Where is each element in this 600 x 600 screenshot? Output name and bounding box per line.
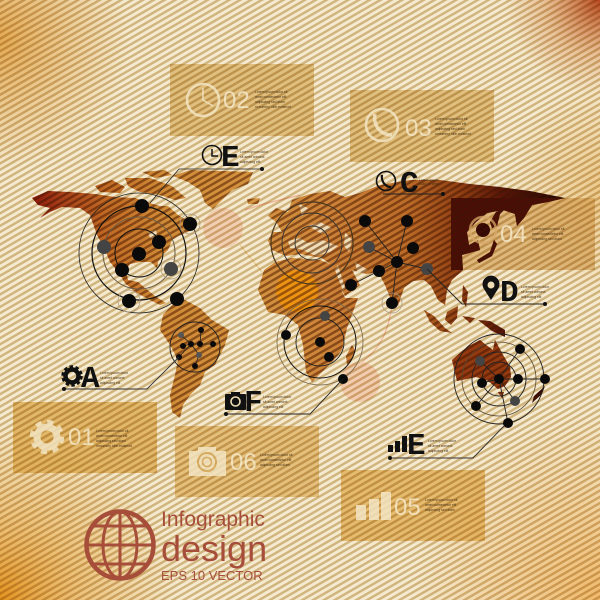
leader and icon: pin D <box>427 269 550 311</box>
panel contents: 05: amet consectetur elit <box>425 503 456 507</box>
leader and icon: camera F: adipiscing elit <box>263 405 283 409</box>
panel: 03 <box>350 90 494 162</box>
title: Infographic design: EPS 10 VECTOR <box>161 568 263 583</box>
circles: Africa <box>277 299 363 385</box>
panel contents: 01: 01 <box>68 424 95 451</box>
panel contents: 01: nonummy nibh euismod <box>96 444 132 448</box>
panel: 01 <box>13 402 157 473</box>
panel contents: 05: adipiscing sed diam <box>425 508 455 512</box>
panel contents: 02: 02 <box>223 87 250 114</box>
panel contents: 03: Lorem ipsum dolor sit <box>435 117 467 121</box>
panel contents: 06: adipiscing sed diam <box>260 463 290 467</box>
panel contents: 01: amet consectetur elit <box>96 434 127 438</box>
title: Infographic design: Infographic <box>161 508 265 531</box>
panel contents: 06: Lorem ipsum dolor sit <box>260 453 292 457</box>
panel contents: 04: Lorem ipsum dolor sit <box>532 227 564 231</box>
panel contents: 01: Lorem ipsum dolor sit <box>96 429 128 433</box>
leader and icon: bars E: adipiscing elit <box>428 449 448 453</box>
leader and icon: gear A: sit amet consect <box>100 376 125 380</box>
panel contents: 02: nonummy nibh euismod <box>255 105 291 109</box>
panel contents: 03 <box>366 109 471 142</box>
panel contents: 06 <box>189 447 292 476</box>
panel: 04 <box>451 198 595 270</box>
leader and icon: bars E: E <box>407 429 426 464</box>
panel: 05 <box>341 470 485 541</box>
map inside panel 04 <box>451 198 565 270</box>
panel: 02 <box>170 64 314 136</box>
leader and icon: phone C: Lorem ipsum <box>419 178 439 182</box>
leader and icon: gear A: A <box>81 362 100 397</box>
panel contents: 04 <box>470 217 564 248</box>
panel contents: 04: amet consectetur elit <box>532 232 563 236</box>
panel contents: 06: amet consectetur elit <box>260 458 291 462</box>
panel contents: 06: 06 <box>230 449 257 476</box>
leader and icon: bars E: Lorem ipsum dolor <box>428 439 457 443</box>
leader and icon: phone C: C <box>400 167 419 202</box>
panel contents: 03: nonummy nibh euismod <box>435 132 471 136</box>
leader and icon: bars E <box>388 426 504 464</box>
leader and icon: camera F: sit amet consect <box>263 400 288 404</box>
panel contents: 03: amet consectetur elit <box>435 122 466 126</box>
leader and icon: pin D: sit amet consect <box>521 290 546 294</box>
panel: 06 <box>175 426 319 497</box>
leader and icon: phone C <box>376 167 445 202</box>
circles: Europe <box>271 202 353 284</box>
leader and icon: camera F <box>224 379 343 421</box>
circles: North America <box>79 193 199 313</box>
dots: North America <box>97 199 200 312</box>
leader and icon: gear A: Lorem ipsum dolor <box>100 371 129 375</box>
network: Australia <box>454 334 550 428</box>
panel contents: 03: adipiscing sed diam <box>435 127 465 131</box>
leader and icon: camera F: F <box>244 386 263 421</box>
leader and icon: pin D: D <box>500 276 519 311</box>
title: Infographic design <box>161 508 267 583</box>
panel contents: 05: 05 <box>394 494 421 521</box>
leader and icon: clock E: Lorem ipsum dolor <box>240 150 269 154</box>
panel contents: 01 <box>32 422 132 452</box>
world map <box>32 170 565 418</box>
icon: globe logo <box>86 512 154 578</box>
title: Infographic design: design <box>161 528 267 569</box>
panel contents: 04: adipiscing sed diam <box>532 237 562 241</box>
leader and icon: pin D: Lorem ipsum dolor <box>521 285 550 289</box>
salmon accent circles <box>203 195 392 402</box>
leader and icon: clock E: adipiscing elit <box>240 160 260 164</box>
leader and icon: pin D: adipiscing elit <box>521 295 541 299</box>
Africa highlight <box>276 270 318 312</box>
panel contents: 02 <box>187 84 291 116</box>
inland seas <box>148 204 368 291</box>
leader and icon: gear A: adipiscing elit <box>100 381 120 385</box>
panel contents: 04: 04 <box>500 221 527 248</box>
panel contents: 05: Lorem ipsum dolor sit <box>425 498 457 502</box>
leader and icon: camera F: Lorem ipsum dolor <box>263 395 292 399</box>
panel contents: 02: adipiscing sed diam <box>255 100 285 104</box>
leader and icon: clock E <box>150 141 269 203</box>
panel contents: 03: 03 <box>405 115 432 142</box>
leader and icon: clock E: sit amet consect <box>240 155 265 159</box>
leader and icon: clock E: E <box>221 141 240 176</box>
circles: South America <box>170 322 220 372</box>
panel contents: 01: adipiscing sed diam <box>96 439 126 443</box>
panel contents: 02: amet consectetur elit <box>255 95 286 99</box>
panel contents: 05 <box>356 492 457 521</box>
Australia darker <box>452 340 511 398</box>
leader and icon: bars E: sit amet consect <box>428 444 453 448</box>
panel contents: 02: Lorem ipsum dolor sit <box>255 90 287 94</box>
leader and icon: gear A <box>62 357 179 397</box>
network: Asia <box>345 215 433 313</box>
leader and icon: phone C: dolor sit amet <box>419 182 439 186</box>
